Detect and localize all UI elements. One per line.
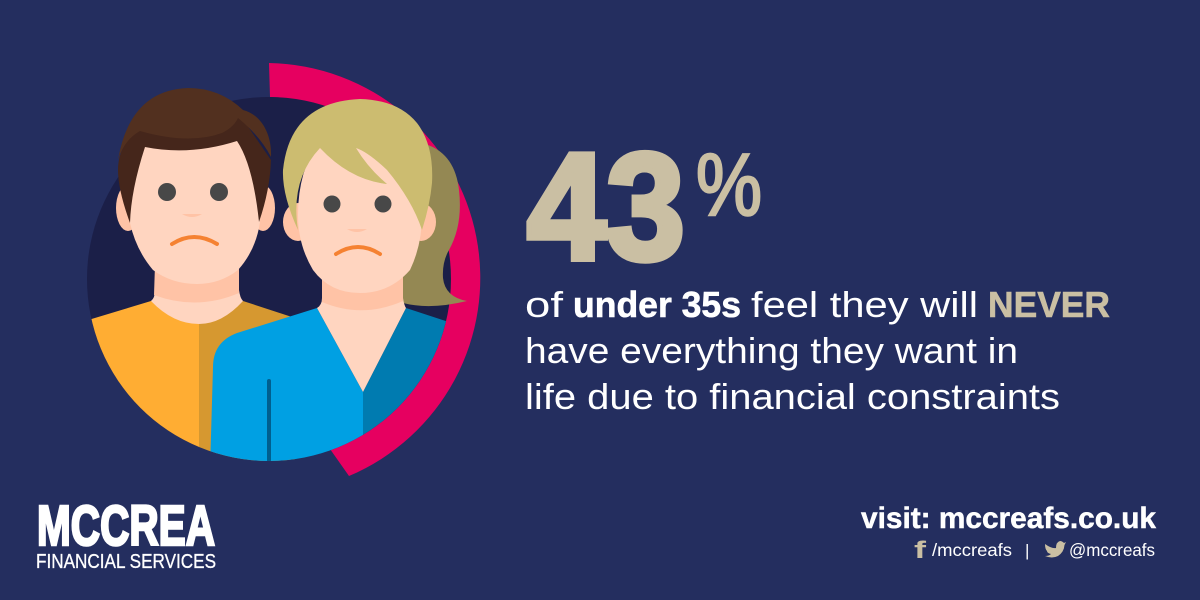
woman ears [283, 203, 313, 241]
43 number: 43 [527, 122, 685, 292]
infographic canvas [37, 63, 1156, 568]
description text: life due to financial constraints [525, 376, 1060, 417]
man shirt [85, 301, 295, 470]
man hair [118, 88, 271, 223]
woman eyes [324, 196, 340, 212]
dark circle backdrop [87, 97, 451, 461]
woman face [298, 140, 422, 293]
man nose [182, 214, 202, 217]
woman shirt [210, 308, 446, 461]
social row [914, 537, 1155, 564]
woman hair [283, 99, 432, 230]
woman figure [210, 99, 446, 461]
website link: visit: mccreafs.co.uk [861, 502, 1156, 535]
man mouth [172, 237, 217, 244]
icon: facebook: f [914, 537, 928, 564]
description text [525, 284, 1110, 417]
description text: under 35s [573, 284, 741, 325]
separator: | [1025, 541, 1029, 560]
description text: of [525, 284, 564, 325]
headline statistic [527, 122, 762, 292]
McCrea logo: FINANCIAL SERVICES [36, 551, 216, 573]
man figure [85, 88, 295, 470]
woman ponytail [403, 145, 467, 306]
pink progress ring [269, 63, 480, 476]
shirt seam [267, 381, 271, 465]
facebook handle: /mccreafs [932, 540, 1012, 560]
description text: NEVER [988, 284, 1110, 325]
man neck [151, 265, 243, 324]
description text: feel they will [751, 284, 978, 325]
woman mouth [336, 247, 380, 254]
McCrea logo: MCCREA [37, 494, 215, 558]
percent sign: % [696, 135, 762, 234]
description text: have everything they want in [525, 330, 1018, 371]
man face [130, 130, 260, 284]
twitter handle: @mccreafs [1069, 540, 1155, 560]
woman chest and neck [317, 270, 406, 392]
man eyes [158, 183, 176, 201]
woman nose [347, 229, 367, 232]
McCrea logo [36, 494, 216, 573]
man ears [116, 185, 140, 231]
icon: twitter bird [1045, 541, 1066, 558]
